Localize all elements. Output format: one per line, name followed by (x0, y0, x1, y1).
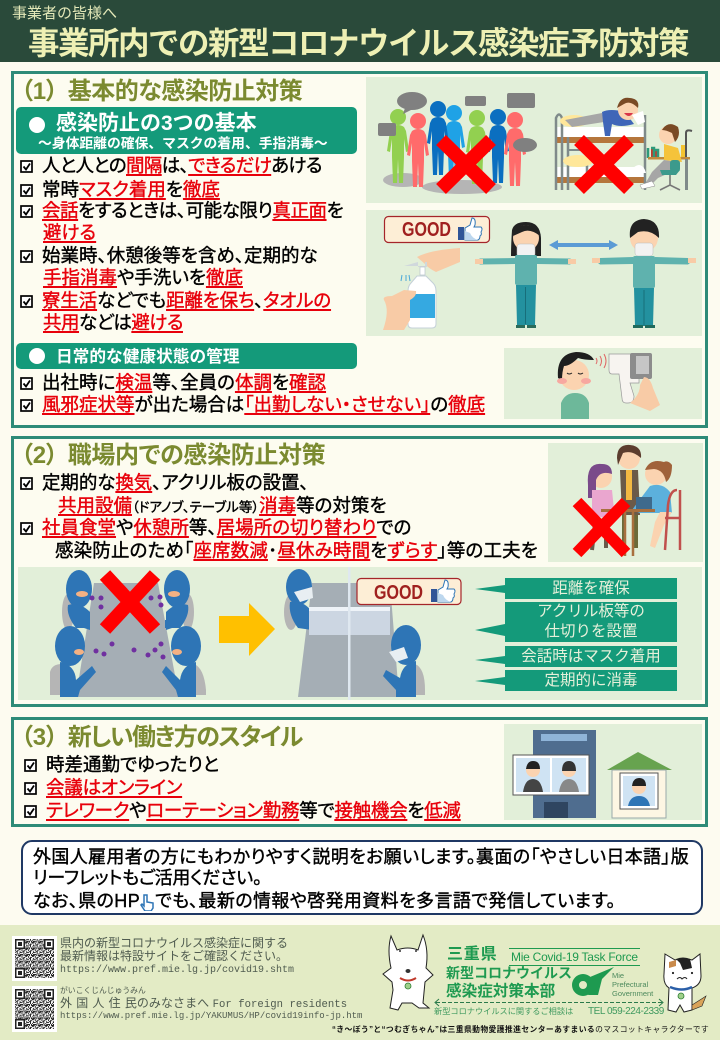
government label: Mie (612, 971, 624, 980)
item 2 continued: 感染防止のため「座席数減･昼休み時間をずらす」等の工夫を (55, 540, 538, 561)
title: 事業所内での新型コロナウイルス感染症予防対策 (28, 25, 688, 61)
site text line 2: 最新情報は特設サイトをご確認ください。 (60, 949, 288, 963)
audience line: 事業者の皆様へ (12, 5, 117, 22)
bullet (29, 117, 45, 133)
tag: distance: 距離を確保 (552, 580, 630, 597)
tag: mask (505, 646, 677, 667)
prefecture name: 三重県 (447, 946, 497, 963)
site URL: https://www.pref.mie.lg.jp/covid19.shtm (60, 965, 294, 976)
item 2: 社員食堂や休憩所等、居場所の切り替わりでの (42, 517, 411, 538)
check item 4: 始業時、休憩後等を含め、定期的な (42, 245, 318, 266)
panel: workplace measures (11, 436, 708, 707)
health item 2: 風邪症状等が出た場合は「出勤しない・させない」の徹底 (42, 394, 485, 415)
check item 5: 寮生活などでも距離を保ち、タオルの (42, 290, 331, 311)
table right (298, 583, 399, 697)
mascot: dog (382, 934, 434, 1011)
item 1: 定期的な換気、アクリル板の設置、 (42, 472, 309, 493)
item 2: 会議はオンライン (46, 777, 182, 798)
good badge: GOOD (374, 582, 423, 604)
bar subtitle: ～身体距離の確保、マスクの着用、手指消毒～ (38, 136, 328, 151)
bar title: 日常的な健康状態の管理 (56, 347, 240, 366)
notice box (21, 840, 703, 915)
government label: Prefectural (612, 980, 648, 989)
good badge (357, 578, 461, 604)
illustration: crowd and bunk bed prohibited (366, 77, 702, 203)
tag: acrylic partition: アクリル板等の (537, 603, 645, 620)
bullet (29, 348, 45, 364)
check item 2: 常時マスク着用を徹底 (42, 179, 220, 200)
furigana: がいこくじんじゅうみん (60, 986, 146, 995)
tag: disinfect: 定期的に消毒 (544, 672, 638, 689)
illustration: people chatting prohibited (548, 443, 703, 562)
red cross marks (441, 140, 629, 189)
site text line 1: 県内の新型コロナウイルス感染症に関する (60, 936, 288, 950)
dashed arrow (434, 998, 664, 1006)
check item 3 continued: 避ける (43, 222, 96, 243)
notice line 2: リーフレットもご活用ください。 (33, 868, 262, 888)
illustration: temperature check (504, 348, 702, 419)
heading 2: （2）職場内での感染防止対策 (10, 442, 325, 469)
tag: disinfect (505, 670, 677, 691)
task force English: Mie Covid-19 Task Force (511, 950, 638, 964)
QR code: foreign residents (12, 986, 57, 1032)
government label: Government (612, 989, 653, 998)
bar title: 感染防止の3つの基本 (56, 112, 257, 135)
panel: new work style (11, 717, 708, 827)
header band (0, 0, 720, 62)
illustration: seating before and after (18, 567, 702, 700)
tag: acrylic partition: 仕切りを設置 (544, 623, 638, 640)
foreign residents URL: https://www.pref.mie.lg.jp/YAKUMUS/HP/covid19info-jp.htm (60, 1011, 362, 1021)
item 3: テレワークやローテーション勤務等で接触機会を低減 (46, 800, 461, 821)
red cross mark (577, 502, 626, 553)
item 1 continued: 共用設備（ドアノブ、テーブル等）消毒等の対策を (58, 495, 387, 516)
item 1: 時差通勤でゆったりと (46, 754, 219, 775)
notice line 1: 外国人雇用者の方にもわかりやすく説明をお願いします。裏面の「やさしい日本語」版 (33, 847, 689, 867)
red cross mark (105, 575, 155, 629)
panel: basic measures (11, 71, 708, 428)
mascot caption: “き～ぼう”と“つむぎちゃん”は三重県動物愛護推進センターあすまいるのマスコットキャラクターです (332, 1025, 709, 1034)
mascot: cat (663, 953, 707, 1013)
illustration: remote work (504, 724, 702, 820)
check item 5 continued: 共用などは避ける (43, 312, 183, 333)
name line 2: 新型コロナウイルス (446, 965, 572, 981)
consultation line: 新型コロナウイルスに関するご相談は (434, 1007, 573, 1016)
check item 3: 会話をするときは、可能な限り真正面を (42, 200, 343, 221)
check item 1: 人と人との間隔は、できるだけあける (42, 155, 322, 176)
notice line 3: なお、県のHP でも、最新の情報や啓発用資料を多言語で発信しています。 (33, 891, 616, 911)
table left is drawn first (76, 583, 179, 697)
heading 1: （1）基本的な感染防止対策 (10, 78, 302, 105)
consultation line (434, 1006, 664, 1017)
tag: distance (505, 578, 677, 599)
foreign residents heading: 外国人住民のみなさまへ For foreign residents (60, 996, 347, 1011)
tag: mask: 会話時はマスク着用 (521, 648, 661, 665)
bar: daily health (16, 343, 357, 369)
name line 3: 感染症対策本部 (446, 983, 555, 1000)
illustration: distancing with masks and sanitizer: GOOD (402, 219, 451, 241)
check item 4 continued: 手指消毒や手洗いを徹底 (43, 267, 243, 288)
tag: acrylic partition (505, 602, 677, 642)
illustration: distancing with masks and sanitizer (366, 210, 702, 336)
consultation line: TEL 059-224-2339 (588, 1006, 664, 1017)
yellow arrow (219, 603, 275, 656)
health item 1: 出社時に検温等、全員の体調を確認 (42, 372, 326, 393)
heading 3: （3）新しい働き方のスタイル (10, 724, 302, 751)
bar: three basics (16, 107, 357, 154)
QR code: covid site (12, 936, 57, 981)
government label (612, 971, 654, 998)
footer band (0, 925, 720, 1040)
prefecture logo (572, 967, 614, 996)
task force name block (434, 945, 664, 1017)
